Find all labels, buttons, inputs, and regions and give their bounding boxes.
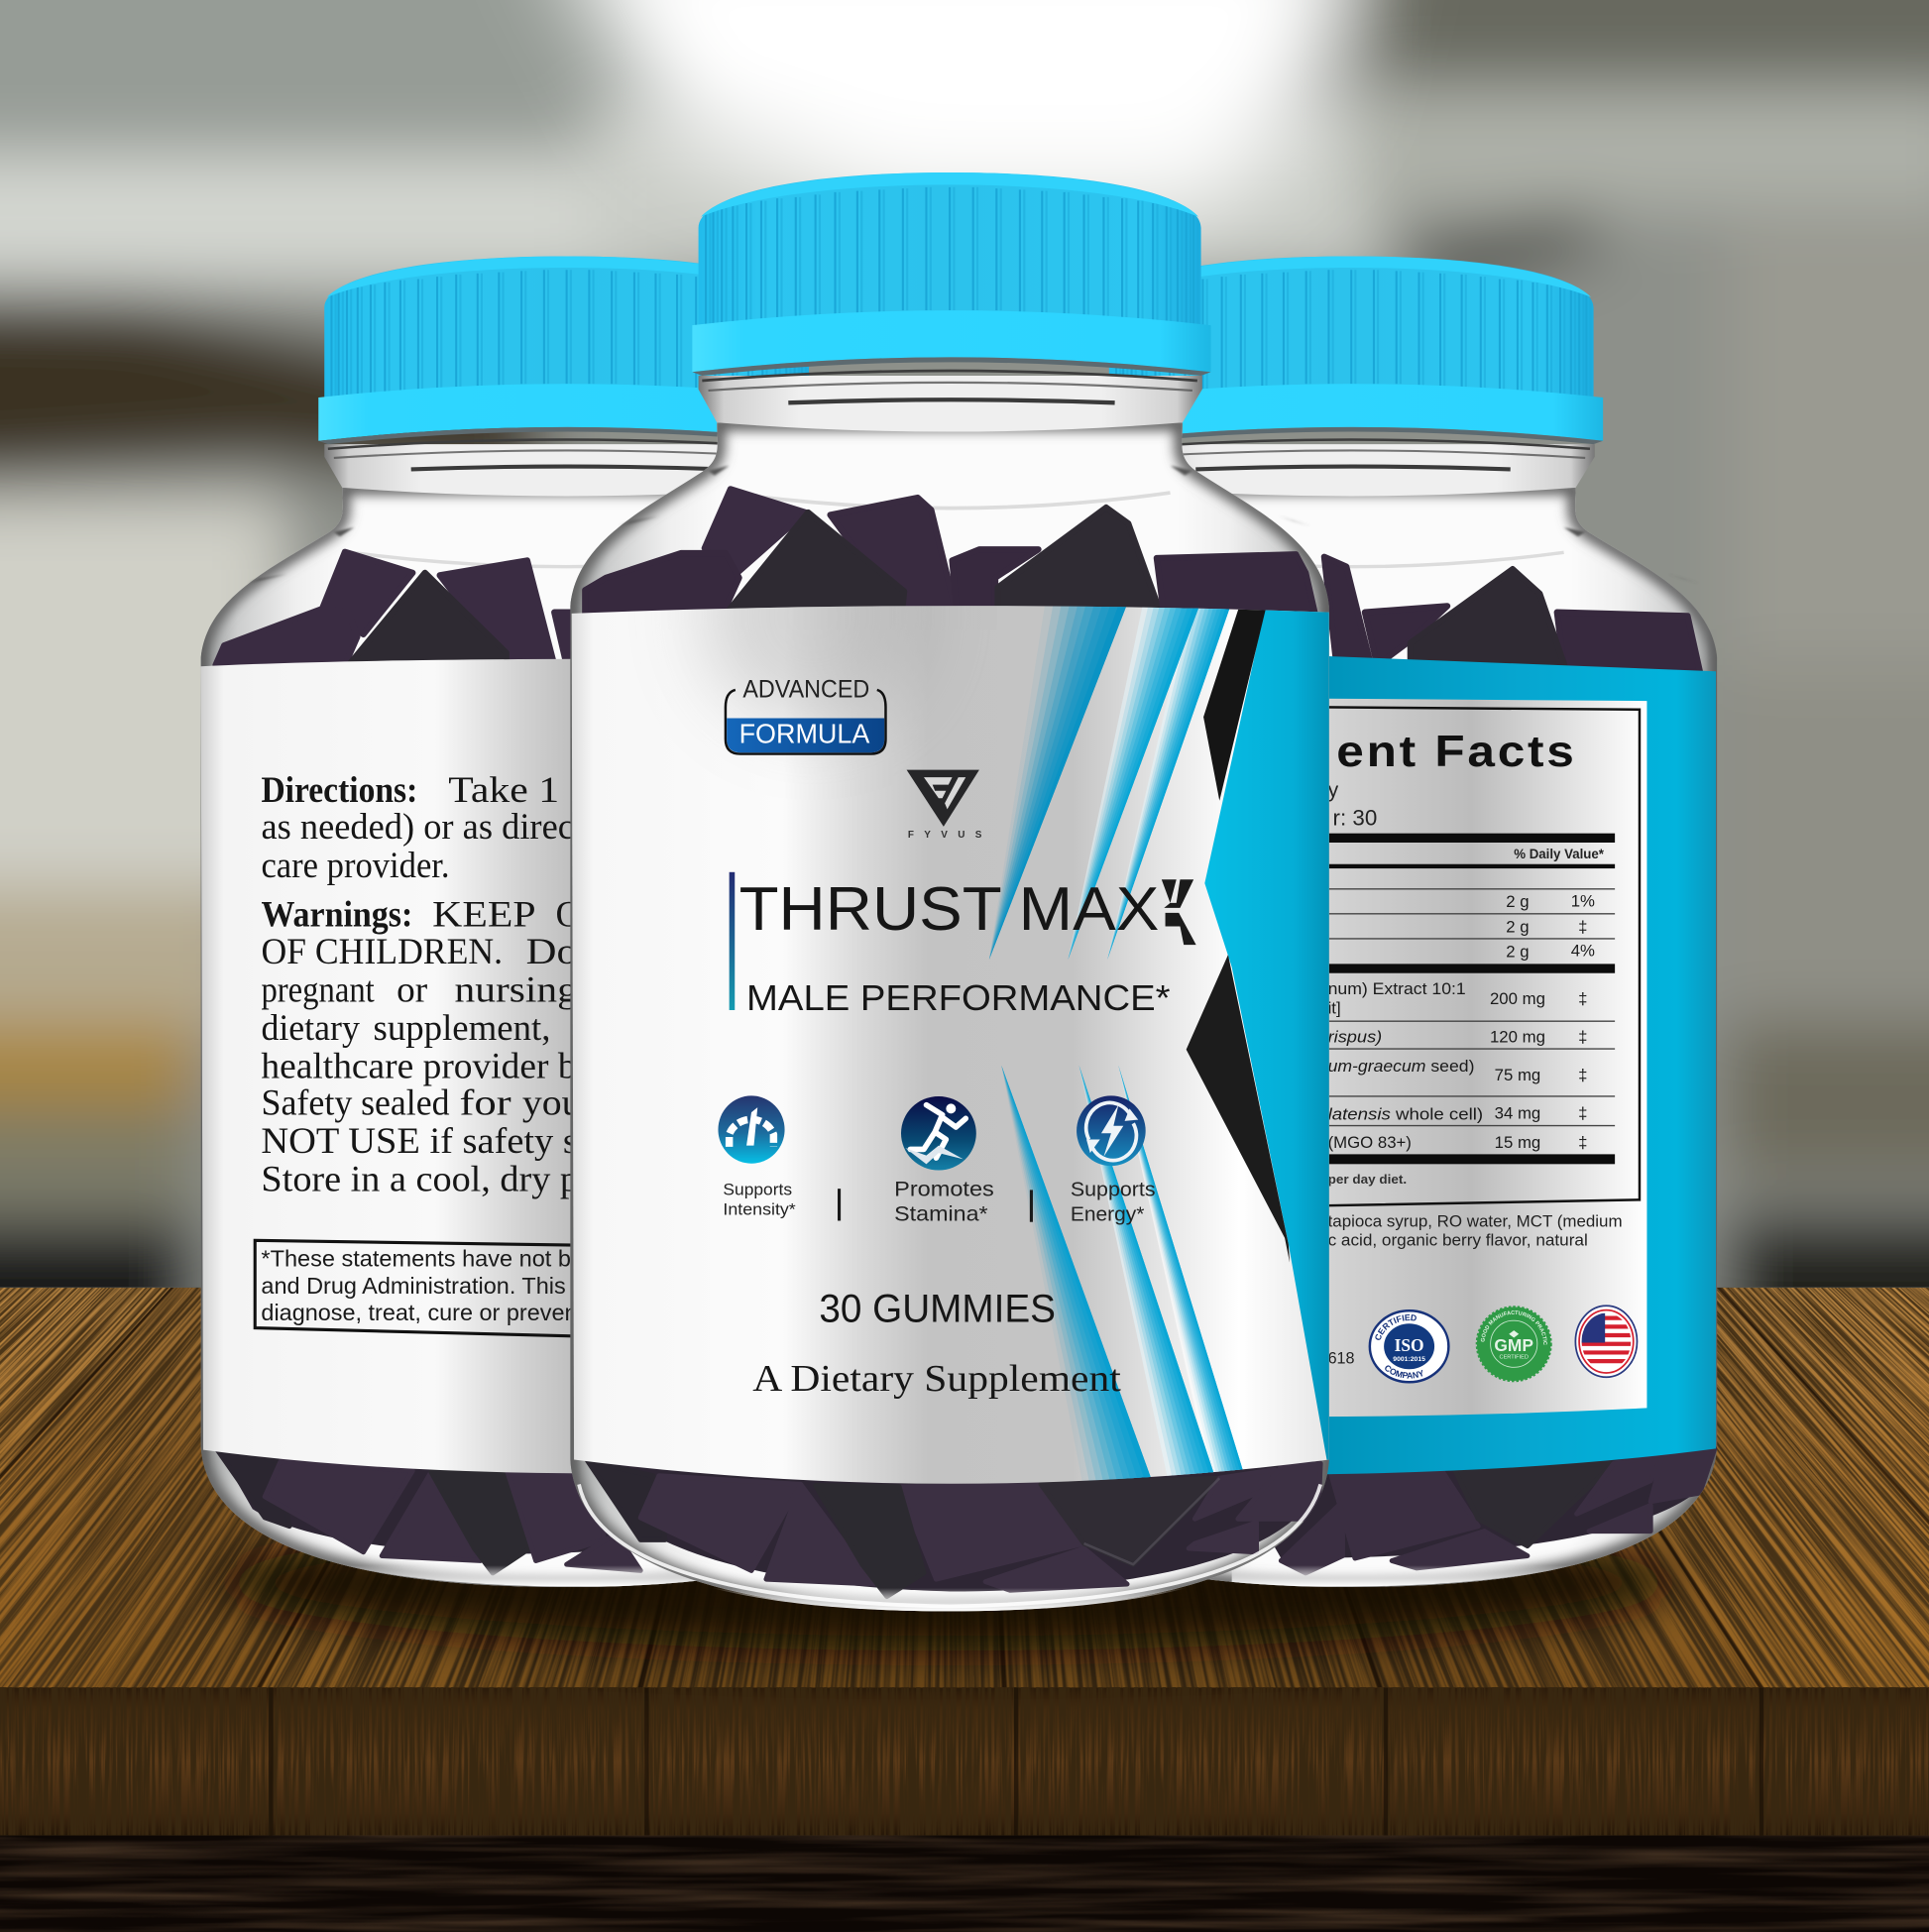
warnings text: sealed xyxy=(361,1083,450,1124)
left bottle glass base xyxy=(351,1566,696,1586)
warnings text: Warnings: xyxy=(261,894,412,935)
nutrient table: 120 mg xyxy=(1490,1027,1545,1046)
nutrient table: ‡ xyxy=(1578,918,1587,937)
title accent bar xyxy=(730,872,735,1010)
facts heading: ent Facts xyxy=(1336,728,1577,776)
warnings text: Safety xyxy=(261,1083,353,1124)
nutrient table: latensis whole cell) xyxy=(1328,1105,1483,1124)
table surface lighting xyxy=(0,1288,1929,1687)
blue side panel xyxy=(1204,591,1336,1491)
nutrient table: 2 g xyxy=(1506,918,1530,937)
nutrient table: per day diet. xyxy=(1328,1172,1407,1187)
nutrient table: ‡ xyxy=(1578,1103,1587,1122)
left bottle top gummies xyxy=(215,552,579,665)
separator xyxy=(1030,1190,1033,1222)
table dark underside xyxy=(0,1836,1929,1932)
warnings text: OF CHILDREN. xyxy=(261,932,503,972)
nutrient table: num) Extract 10:1 xyxy=(1328,979,1466,998)
directions text: care provider. xyxy=(261,846,450,886)
center bottle rim highlight xyxy=(579,1484,1320,1606)
blurred room background xyxy=(0,0,1929,1288)
nutrient table: 2 g xyxy=(1506,943,1530,962)
ISO seal: 9001:2015 xyxy=(1393,1356,1425,1363)
warnings text xyxy=(261,894,582,1200)
center bottle: front label: Intensity* xyxy=(723,1199,796,1218)
center bottle glass base xyxy=(570,1466,1329,1611)
center bottle: front label: Stamina* xyxy=(894,1202,988,1225)
nutrient table: % Daily Value* xyxy=(1514,847,1605,861)
disclaimer box: *These statements have not be xyxy=(261,1245,584,1271)
label: promotes stamina: Promotes xyxy=(894,1179,994,1201)
directions text: Directions: xyxy=(261,770,417,811)
GMP seal: GMP xyxy=(1494,1335,1533,1355)
directions text: as needed) or as direct xyxy=(261,807,585,848)
supplement line: A Dietary Supplement xyxy=(752,1358,1121,1400)
right bottle lower gummies xyxy=(1232,1448,1715,1573)
USA flag seal xyxy=(1575,1306,1637,1377)
nutrient table: ‡ xyxy=(1578,1133,1587,1152)
nutrient table: 75 mg xyxy=(1495,1066,1540,1084)
bright ceiling light xyxy=(542,0,1367,209)
advanced formula badge: FORMULA xyxy=(739,718,870,748)
table front face xyxy=(0,1687,1929,1836)
GMP seal: CERTIFIED xyxy=(1500,1355,1529,1361)
center bottle top gummies xyxy=(585,489,1315,616)
ingredients text: tapioca syrup, RO water, MCT (medium xyxy=(1328,1213,1623,1231)
nutrient table: ‡ xyxy=(1578,989,1587,1008)
advanced formula badge xyxy=(726,676,885,754)
ISO seal xyxy=(1368,1309,1450,1384)
warnings text: O xyxy=(555,894,582,935)
nutrient table: (MGO 83+) xyxy=(1328,1133,1412,1152)
black upper chevron xyxy=(1203,591,1270,801)
ISO seal: ISO xyxy=(1395,1336,1424,1355)
right bottle glass and cap xyxy=(985,256,1717,1587)
directions text xyxy=(261,770,585,886)
icon: stamina runner xyxy=(901,1096,976,1171)
count: 30 GUMMIES xyxy=(819,1287,1056,1330)
icon: energy cycle xyxy=(1077,1095,1146,1166)
warnings text: supplement, xyxy=(374,1008,550,1049)
nutrient table: ‡ xyxy=(1578,1027,1587,1046)
label base xyxy=(570,591,1334,1515)
warnings text: healthcare provider b xyxy=(261,1046,577,1086)
warnings text: you xyxy=(522,1083,582,1124)
center bottle: front label xyxy=(570,172,1336,1611)
GMP seal xyxy=(1475,1306,1552,1382)
nutrient table: ‡ xyxy=(1578,1066,1587,1084)
label: supports intensity: Supports xyxy=(723,1180,792,1198)
nutrient table: 1% xyxy=(1571,892,1595,911)
nutrient table xyxy=(1328,834,1615,1187)
nutrient table: rispus) xyxy=(1328,1027,1382,1046)
nutrient table: 200 mg xyxy=(1490,989,1545,1008)
product name: THRUST MAX xyxy=(739,875,1159,944)
disclaimer box: and Drug Administration. This s xyxy=(261,1273,584,1299)
nutrient table: um-graecum seed) xyxy=(1328,1057,1474,1076)
subtitle: MALE PERFORMANCE* xyxy=(746,977,1171,1018)
center bottle lower gummies xyxy=(588,1461,1320,1596)
right bottle blue label xyxy=(1305,655,1716,1474)
left bottle: directions and warnings xyxy=(201,256,933,1587)
warnings text: for xyxy=(460,1083,511,1124)
directions text: Take 1 xyxy=(448,770,559,811)
warnings text: nursing xyxy=(455,969,578,1010)
lot number: 618 xyxy=(1328,1350,1355,1368)
disclaimer box: diagnose, treat, cure or prevent xyxy=(261,1300,585,1325)
advanced formula badge: ADVANCED xyxy=(742,676,869,703)
nutrient table: 4% xyxy=(1571,941,1595,960)
left bottle label xyxy=(201,659,739,1478)
bottle shadows on table xyxy=(222,1515,1675,1650)
icon: intensity gauge xyxy=(718,1095,785,1164)
left bottle lower gummies xyxy=(215,1447,640,1573)
upper blue stripes xyxy=(989,591,1235,960)
black lower chevron xyxy=(1187,955,1290,1263)
supplement facts panel xyxy=(1328,698,1647,1418)
warnings text: or xyxy=(397,969,428,1010)
GMP seal: GOOD MANUFACTURING PRACTICE xyxy=(1481,1310,1547,1345)
stylized X mark xyxy=(1162,879,1196,945)
nutrient table: 2 g xyxy=(1506,892,1530,911)
disclaimer box xyxy=(255,1240,591,1336)
warnings text: Store in a cool, dry p xyxy=(261,1160,579,1200)
right bottle: supplement facts xyxy=(570,172,1717,1612)
upper label shading xyxy=(702,505,924,727)
wooden table top surface xyxy=(0,1288,1929,1687)
supplement facts panel: r: 30 xyxy=(1333,806,1377,831)
center bottle glass and cap xyxy=(570,172,1329,1611)
separator xyxy=(838,1189,841,1220)
FYVUS logo xyxy=(907,770,982,841)
right bottle top gummies xyxy=(1324,557,1700,671)
nutrient table: 15 mg xyxy=(1495,1133,1540,1152)
serving text: y xyxy=(1328,779,1339,802)
ISO seal: CERTIFIED xyxy=(1375,1314,1417,1340)
front label xyxy=(570,505,1336,1515)
nutrient table: 34 mg xyxy=(1495,1103,1540,1122)
supplement facts panel: c acid, organic berry flavor, natural xyxy=(1328,1231,1588,1249)
label: supports energy: Supports xyxy=(1071,1180,1156,1201)
left bottle glass and cap xyxy=(201,256,933,1587)
warnings text: NOT USE if safety s xyxy=(261,1121,578,1162)
warnings text: dietary xyxy=(261,1008,360,1049)
warnings text: Do xyxy=(526,932,578,972)
right bottle glass base xyxy=(1231,1566,1567,1586)
ISO seal: COMPANY xyxy=(1385,1365,1423,1379)
warnings text: pregnant xyxy=(261,969,375,1010)
FYVUS logo: FYVUS xyxy=(908,830,982,841)
warnings text: KEEP xyxy=(432,894,536,935)
nutrient table: it] xyxy=(1328,999,1341,1018)
center bottle: front label: Energy* xyxy=(1071,1203,1145,1225)
lower blue stripes xyxy=(1001,1066,1249,1491)
